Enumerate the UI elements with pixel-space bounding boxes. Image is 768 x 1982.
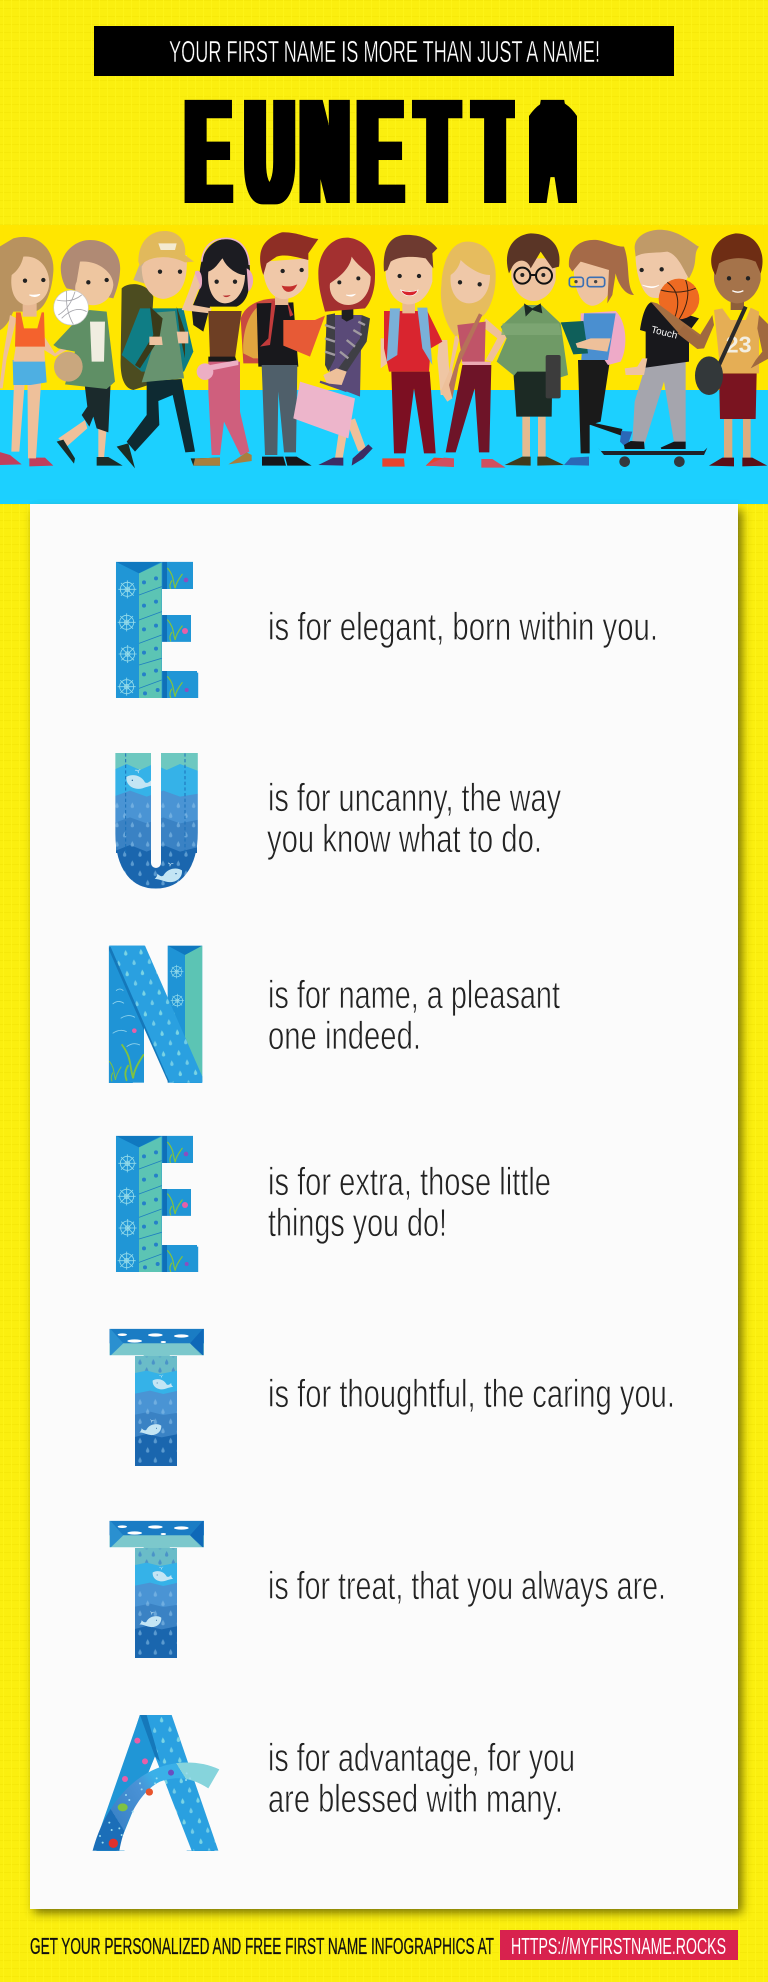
icon: letter E <box>113 1134 200 1274</box>
person: skater with basketball: Touch <box>650 325 678 342</box>
text: E lines: things you do! <box>268 1202 447 1245</box>
icon: letter A <box>90 1713 222 1853</box>
person: guy with book <box>241 232 325 466</box>
person: girl with volleyball <box>53 240 123 466</box>
banner: tagline <box>94 26 674 76</box>
text: A lines: are blessed with many. <box>268 1778 563 1821</box>
text: U lines: is for uncanny, the way <box>268 777 561 820</box>
person: blonde girl <box>426 242 507 468</box>
person: red-haired girl with pink bag <box>293 238 375 466</box>
icon: letter T <box>108 1519 205 1660</box>
person: guy in red tee <box>381 235 454 467</box>
text: E lines <box>268 1161 551 1245</box>
text: U lines <box>267 777 561 861</box>
icon: letter E <box>113 560 200 700</box>
icon: letter N <box>107 943 205 1085</box>
text: N lines: one indeed. <box>268 1015 421 1058</box>
person: skater with basketball <box>598 230 707 467</box>
person: guy in jersey with bag: 23 <box>726 331 752 357</box>
person: backpacker in cap <box>117 231 220 468</box>
text: A lines: is for advantage, for you <box>268 1737 575 1780</box>
people band <box>0 225 768 504</box>
person: girl with ponytail and tablet <box>561 240 634 466</box>
person: guy in jersey with bag <box>677 233 768 466</box>
icon: letter T <box>108 1327 205 1468</box>
text: N lines: is for name, a pleasant <box>268 974 560 1017</box>
text: N lines <box>268 974 560 1058</box>
text: A lines <box>268 1737 575 1821</box>
icon: letter U <box>113 750 200 893</box>
panel: letters <box>30 504 742 1913</box>
person: girl in orange top <box>0 237 82 466</box>
person: guy with glasses <box>497 233 568 466</box>
text: E lines: is for extra, those little <box>268 1161 551 1204</box>
person: girl with headphones <box>182 238 253 466</box>
title: EUNETTA <box>187 70 576 234</box>
text: U lines: you know what to do. <box>267 818 542 861</box>
